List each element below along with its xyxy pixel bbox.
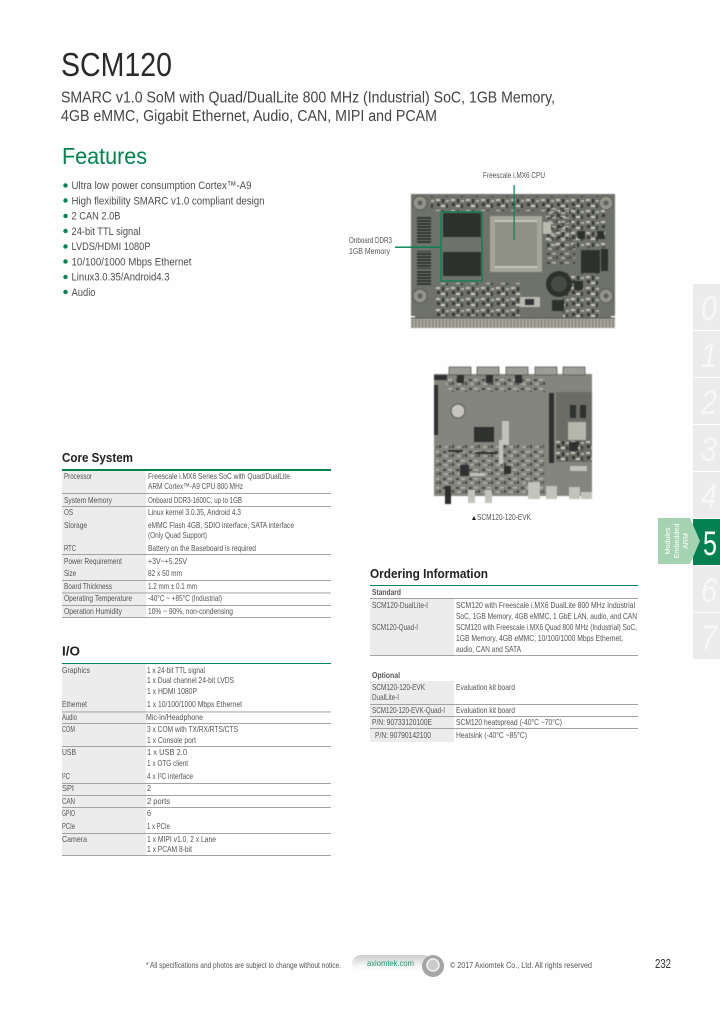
table: I/O: 1 x PCIe: [147, 821, 170, 831]
table: standard ordering: SoC, 1GB Memory, 4GB eMMC, 1 GbE LAN, audio, and CAN: [456, 611, 637, 621]
table: standard ordering: [370, 585, 638, 656]
table: standard ordering: SCM120-Quad-I: [372, 622, 418, 632]
subtitle: [61, 90, 555, 125]
table: standard ordering: 1GB Memory, 4GB eMMC, 10/100/1000 Mbps Ethernet,: [456, 633, 623, 643]
side navigation tabs: 3: [701, 431, 717, 469]
table: core system: Processor: [64, 471, 92, 481]
table: optional ordering: SCM120-120-EVK-Quad-I: [372, 705, 445, 715]
table: core system: Linux kernel 3.0.35, Android 4.3: [148, 507, 241, 517]
table: I/O: Camera: [62, 834, 87, 844]
active section label: ARM: [681, 533, 690, 549]
table: optional ordering: P/N: 90733120100E: [372, 717, 432, 727]
table: optional ordering: Optional: [372, 670, 400, 680]
table: core system: System Memory: [64, 495, 113, 505]
table: I/O: 3 x COM with TX/RX/RTS/CTS: [147, 724, 238, 734]
table: I/O: Audio: [62, 712, 77, 722]
side navigation tabs: [693, 284, 720, 659]
table: optional ordering: Heatsink (-40°C ~85°C): [456, 730, 527, 740]
feature list: [63, 180, 264, 299]
caption: evaluation kit: SCM120-120-EVK: [477, 512, 531, 522]
table: standard ordering: SCM120 with Freescale i.MX6 DualLite 800 MHz Industrial: [456, 600, 635, 610]
side navigation tabs: 7: [701, 619, 718, 657]
table: I/O: 1 x USB 2.0: [147, 747, 187, 757]
table: I/O: Ethernet: [62, 699, 88, 709]
table: optional ordering: P/N: 90790142100: [375, 730, 431, 740]
table: optional ordering: [370, 670, 638, 742]
side navigation tabs: 2: [700, 384, 717, 422]
subtitle: 4GB eMMC, Gigabit Ethernet, Audio, CAN, MIPI and PCAM: [61, 108, 437, 125]
table: I/O: 1 x Console port: [147, 735, 197, 745]
table: standard ordering: SCM120-DualLite-I: [372, 600, 428, 610]
callout: onboard DDR3 memory: Onboard DDR3: [349, 235, 392, 245]
active section label: Embedded: [672, 524, 681, 558]
feature list: Ultra low power consumption Cortex™-A9: [72, 180, 252, 192]
feature list: LVDS/HDMI 1080P: [72, 241, 150, 253]
table: I/O: CAN: [62, 796, 75, 806]
table: core system: [62, 469, 331, 618]
subtitle: SMARC v1.0 SoM with Quad/DualLite 800 MHz (Industrial) SoC, 1GB Memory,: [61, 90, 555, 106]
table: core system: Size: [64, 568, 76, 578]
table: core system: 10% ~ 90%, non-condensing: [148, 606, 233, 616]
table: I/O: GPIO: [62, 808, 75, 818]
table: optional ordering: Evaluation kit board: [456, 682, 515, 692]
feature list: 24-bit TTL signal: [72, 226, 140, 238]
table: core system: 1.2 mm ± 0.1 mm: [148, 581, 197, 591]
side navigation tabs: 1: [701, 337, 717, 375]
table: core system: +3V~+5.25V: [148, 556, 187, 566]
heading: I/O: I/O: [62, 644, 80, 658]
title: SCM120: [61, 46, 172, 83]
feature list: 10/100/1000 Mbps Ethernet: [72, 256, 192, 268]
table: core system: eMMC Flash 4GB, SDIO interface, SATA interface: [148, 520, 294, 530]
table: standard ordering: SCM120 with Freescale i.MX6 Quad 800 MHz (Industrial) SoC,: [456, 622, 637, 632]
footer: website search pill: [352, 955, 444, 977]
footer: website search pill: axiomtek.com: [367, 958, 414, 968]
page number: 232: [655, 957, 671, 971]
footer: copyright: © 2017 Axiomtek Co., Ltd. All rights reserved: [450, 960, 592, 970]
feature list: High flexibility SMARC v1.0 compliant design: [72, 196, 264, 208]
table: optional ordering: SCM120 heatspread (-40°C ~70°C): [456, 717, 562, 727]
table: I/O: SPI: [62, 783, 74, 793]
table: core system: 82 x 50 mm: [148, 568, 182, 578]
feature list: Audio: [72, 287, 96, 299]
table: core system: Board Thickness: [64, 581, 112, 591]
table: standard ordering: audio, CAN and SATA: [456, 644, 521, 654]
callout: Freescale i.MX6 CPU: [483, 170, 545, 240]
table: I/O: 1 x OTG client: [147, 758, 189, 768]
table: core system: (Only Quad Support): [148, 530, 207, 540]
table: standard ordering: Standard: [372, 587, 401, 597]
feature list: 2 CAN 2.0B: [72, 210, 120, 222]
callout: onboard DDR3 memory: [349, 212, 482, 281]
table: I/O: 2 ports: [147, 796, 170, 806]
side navigation tabs: 4: [701, 478, 717, 516]
table: core system: Onboard DDR3-1600C, up to 1GB: [148, 495, 242, 505]
board photo: SCM120-120-EVK: [434, 367, 592, 504]
table: I/O: 1 x 24-bit TTL signal: [147, 665, 205, 675]
table: core system: Operating Temperature: [64, 593, 132, 603]
table: I/O: 2: [147, 783, 151, 793]
table: optional ordering: Evaluation kit board: [456, 705, 515, 715]
table: core system: Freescale i.MX6 Series SoC with Quad/DualLite: [148, 471, 290, 481]
table: I/O: 6: [147, 808, 151, 818]
table: I/O: COM: [62, 724, 75, 734]
table: I/O: [62, 663, 331, 856]
table: core system: Operation Humidity: [64, 606, 123, 616]
table: I/O: 4 x I²C interface: [147, 771, 193, 781]
table: core system: OS: [64, 507, 73, 517]
table: core system: Storage: [64, 520, 87, 530]
table: optional ordering: SCM120-120-EVK: [372, 682, 425, 692]
callout: onboard DDR3 memory: 1GB Memory: [349, 246, 391, 256]
heading: ordering information: Ordering Information: [370, 566, 488, 581]
table: I/O: PCIe: [62, 821, 75, 831]
table: core system: Power Requirement: [64, 556, 123, 566]
table: I/O: 1 x MIPI v1.0, 2 x Lane: [147, 834, 216, 844]
heading: features: Features: [62, 143, 147, 169]
table: I/O: I²C: [62, 771, 70, 781]
table: core system: RTC: [64, 543, 76, 553]
side navigation tabs: 6: [701, 572, 717, 610]
table: core system: -40°C ~ +85°C (Industrial): [148, 593, 222, 603]
table: core system: ARM Cortex™-A9 CPU 800 MHz: [148, 481, 243, 491]
table: I/O: 1 x HDMI 1080P: [147, 686, 197, 696]
table: I/O: 1 x Dual channel 24-bit LVDS: [147, 675, 234, 685]
board photo: SCM120 module: [411, 194, 615, 328]
table: I/O: Mic-in/Headphone: [146, 712, 203, 722]
footer: disclaimer: * All specifications and photos are subject to change without notice.: [146, 960, 341, 970]
table: I/O: Graphics: [62, 665, 90, 675]
callout: Freescale i.MX6 CPU: Freescale i.MX6 CPU: [483, 170, 545, 180]
feature list: Linux3.0.35/Android4.3: [72, 272, 170, 284]
active section label: [658, 518, 700, 564]
table: I/O: USB: [62, 747, 76, 757]
table: core system: Battery on the Baseboard is required: [148, 543, 256, 553]
side navigation tabs: 0: [701, 290, 717, 328]
table: I/O: 1 x 10/100/1000 Mbps Ethernet: [147, 699, 243, 709]
active section label: Modules: [663, 527, 672, 555]
table: optional ordering: DualLite-I: [372, 692, 399, 702]
table: I/O: 1 x PCAM 8-bit: [147, 844, 193, 854]
heading: core system: Core System: [62, 450, 133, 465]
